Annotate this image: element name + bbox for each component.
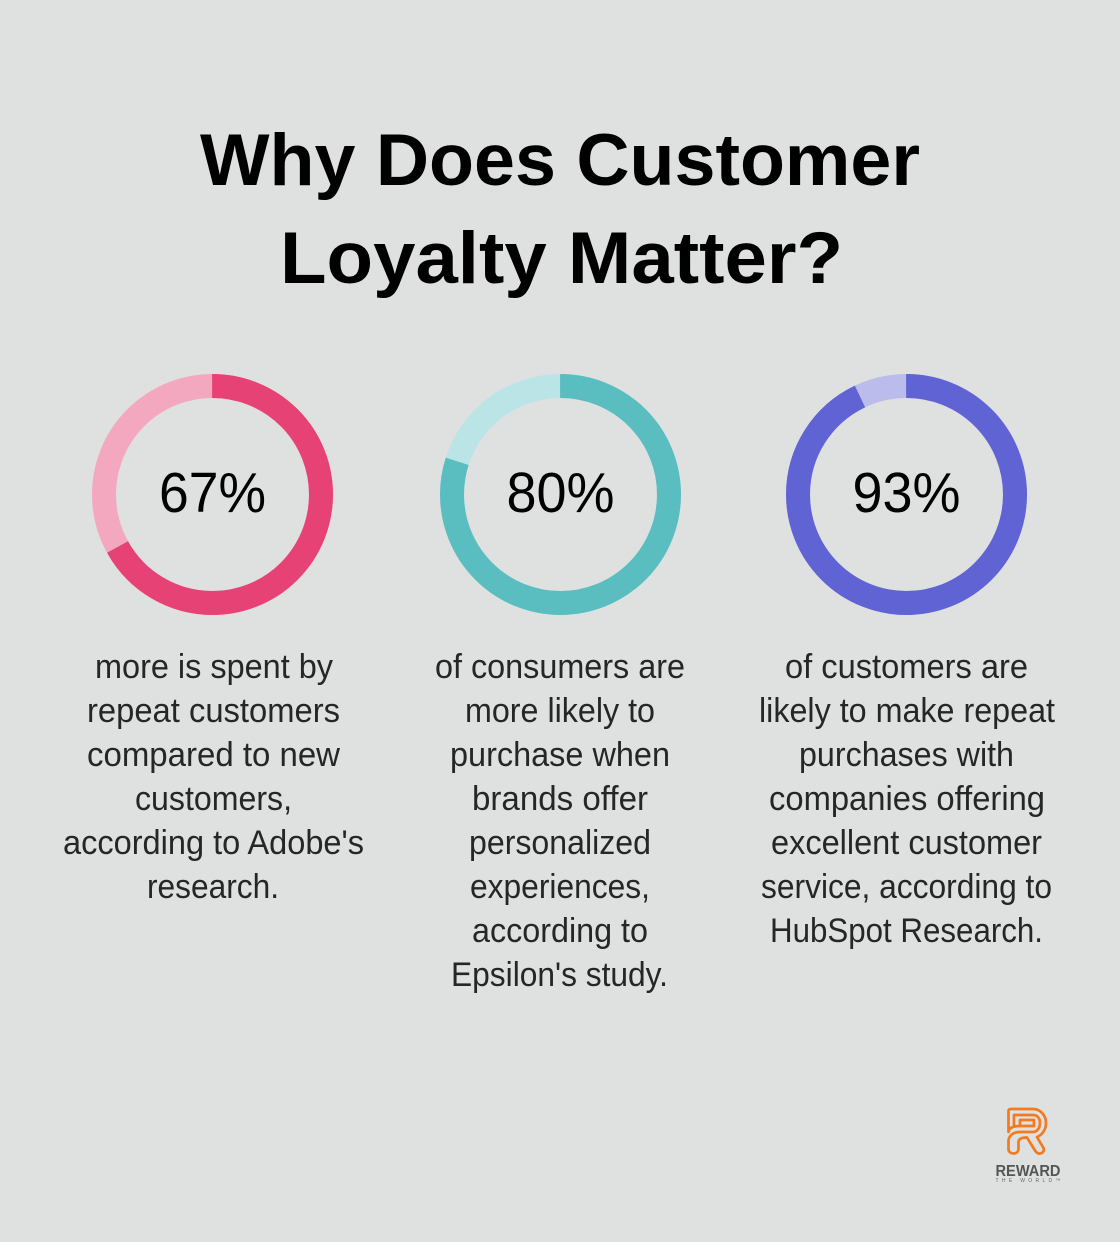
donut chart: 67% — [104, 386, 321, 603]
description: Adobe: compared to new — [87, 736, 340, 774]
description: Adobe: research. — [147, 868, 279, 906]
title: Why Does Customer — [200, 120, 920, 201]
panel: 67% statistic — [63, 386, 364, 906]
description: Epsilon: Epsilon's study. — [451, 956, 668, 994]
description: HubSpot: service, according to — [761, 868, 1052, 906]
description: HubSpot: purchases with — [799, 736, 1014, 774]
description: HubSpot: HubSpot Research. — [770, 912, 1043, 950]
logo: Reward the World — [996, 1109, 1060, 1184]
value: 80%: 80% — [506, 461, 614, 525]
description: Epsilon: personalized — [469, 824, 651, 862]
description: Adobe: more is spent by — [95, 648, 334, 686]
description: Epsilon — [435, 648, 685, 994]
description: Epsilon: brands offer — [472, 780, 648, 818]
title — [200, 120, 920, 299]
icon: orange R mark — [1008, 1109, 1046, 1154]
description: HubSpot: of customers are — [785, 648, 1028, 686]
tagline: THE WORLD™ — [996, 1178, 1060, 1184]
wordmark: REWARD — [996, 1163, 1060, 1180]
description: Epsilon: according to — [472, 912, 648, 950]
description: HubSpot: excellent customer — [771, 824, 1042, 862]
panel: 93% statistic — [759, 386, 1055, 950]
description: Epsilon: of consumers are — [435, 648, 685, 686]
description: Adobe: according to Adobe's — [63, 824, 364, 862]
description: Epsilon: more likely to — [465, 692, 655, 730]
description: Adobe: customers, — [135, 780, 292, 818]
description: HubSpot: companies offering — [769, 780, 1045, 818]
description: Epsilon: experiences, — [470, 868, 650, 906]
donut chart: 93% — [798, 386, 1015, 603]
description: Adobe: repeat customers — [87, 692, 340, 730]
donut chart: 80% — [452, 386, 669, 603]
description: Epsilon: purchase when — [450, 736, 670, 774]
value: 93%: 93% — [852, 461, 960, 525]
description: Adobe — [63, 648, 364, 906]
value: 67%: 67% — [159, 461, 266, 525]
title: Loyalty Matter? — [280, 218, 843, 299]
description: HubSpot: likely to make repeat — [759, 692, 1055, 730]
panel: 80% statistic — [435, 386, 685, 994]
description: HubSpot — [759, 648, 1055, 950]
